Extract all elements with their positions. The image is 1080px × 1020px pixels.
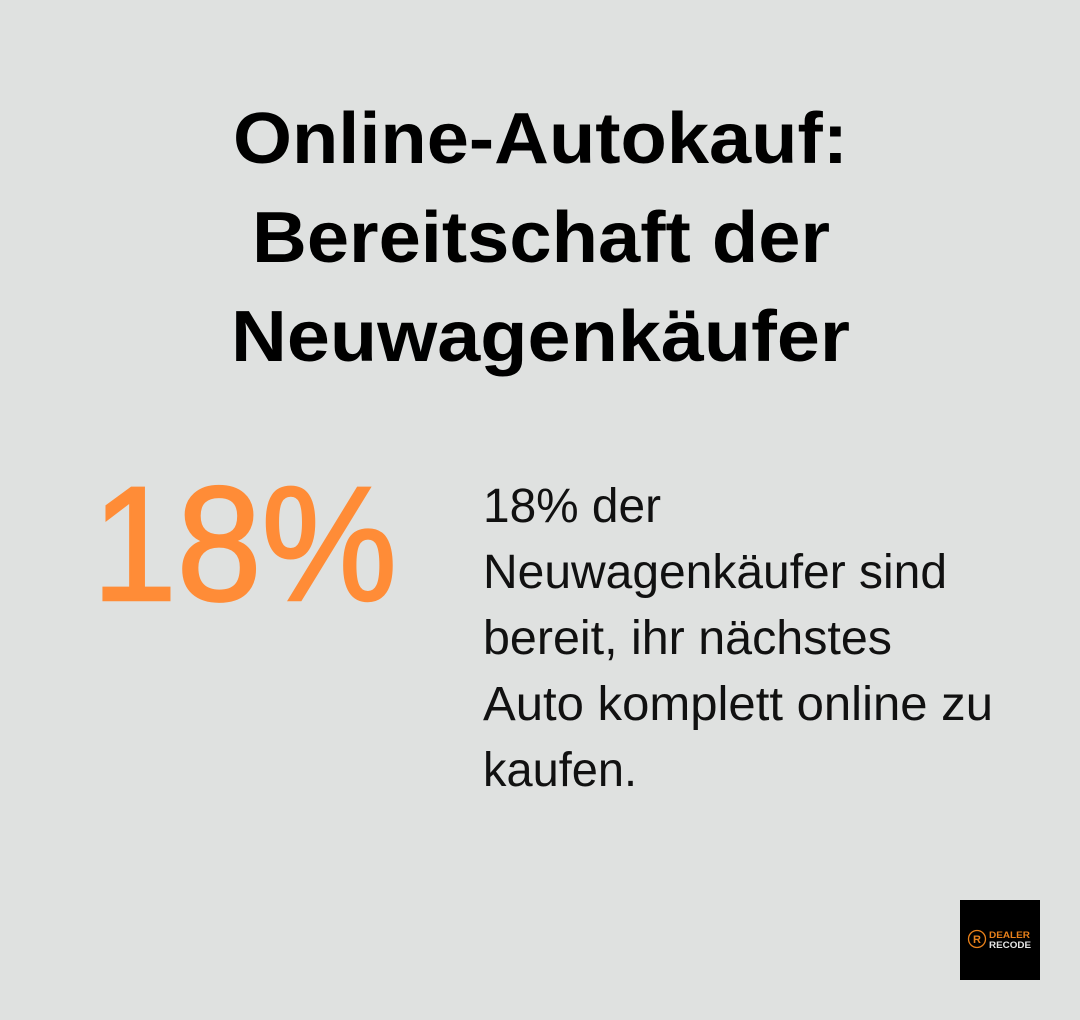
description text: kaufen.	[483, 744, 637, 797]
title: Neuwagenkäufer	[231, 297, 850, 377]
title: Online-Autokauf:	[233, 99, 848, 179]
big statistic: 18%: 18%	[92, 452, 397, 635]
logo: Dealer Recode: DEALER	[989, 930, 1030, 941]
description text: 18% der	[483, 480, 661, 533]
title	[231, 99, 850, 377]
description text	[483, 480, 993, 797]
logo: Dealer Recode	[960, 900, 1040, 980]
description text: Neuwagenkäufer sind	[483, 546, 947, 599]
description text: bereit, ihr nächstes	[483, 612, 892, 665]
logo: Dealer Recode: RECODE	[989, 940, 1031, 951]
description text: Auto komplett online zu	[483, 678, 993, 731]
logo: Dealer Recode: R	[973, 934, 981, 946]
title: Bereitschaft der	[252, 198, 830, 278]
